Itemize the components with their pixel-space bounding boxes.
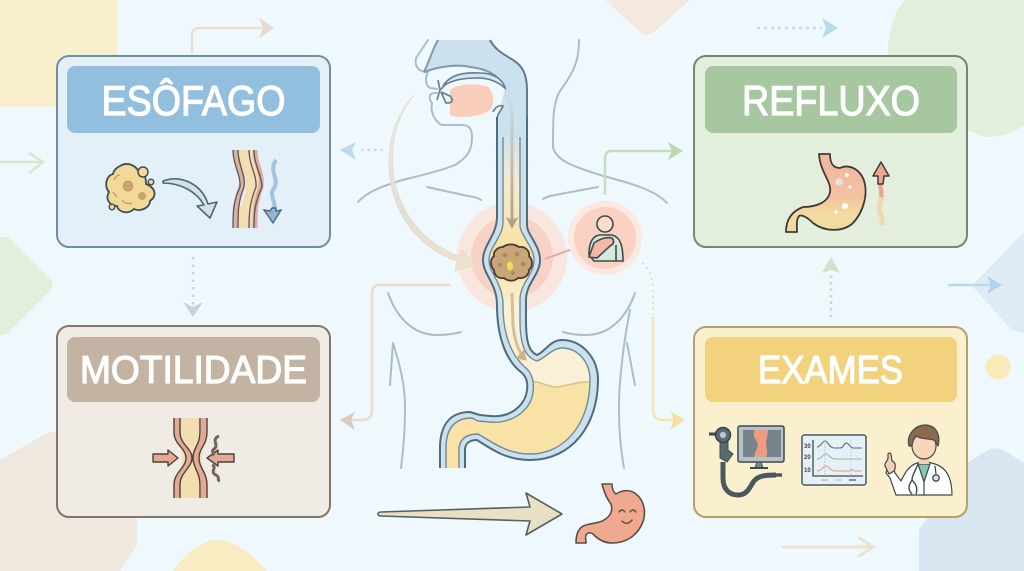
decorative arrow left	[0, 153, 43, 173]
panel: refluxo	[694, 56, 967, 247]
connector line tumor to symptom	[545, 248, 575, 259]
decorative arrow top right	[757, 18, 838, 38]
icon: right pressure arrow	[207, 450, 234, 466]
icon: healthy smiling stomach	[576, 484, 644, 543]
refluxo header	[705, 66, 957, 133]
icon: food bolus	[106, 164, 155, 212]
decorative arrow bottom	[782, 537, 873, 557]
decorative arrow right	[948, 276, 1002, 294]
esofago title: ESÔFAGO	[102, 77, 286, 124]
tongue	[450, 84, 493, 117]
icon: doctor	[885, 425, 952, 495]
arrow inside esophagus upper	[505, 95, 517, 228]
icon: chart: 30	[804, 444, 811, 450]
icon: endoscope	[709, 428, 782, 495]
exames title: EXAMES	[758, 349, 903, 392]
icon: left pressure arrow	[153, 450, 178, 466]
icon: monitor	[738, 426, 784, 468]
icon: curved arrow	[163, 179, 217, 218]
palate arch and lips	[437, 73, 505, 120]
panel: exames	[694, 327, 967, 517]
esophagus and stomach	[424, 40, 600, 470]
arrow: to motilidade	[340, 285, 450, 430]
curved arrow from mouth to tumor	[389, 95, 476, 271]
icon: stomach with acid	[786, 154, 866, 232]
arrow: to refluxo	[605, 142, 683, 195]
arrow: dotted to esofago	[340, 142, 383, 160]
arrow inside esophagus lower	[512, 293, 526, 360]
icon: spasm waves	[212, 436, 220, 481]
icon: narrowed esophagus	[174, 418, 207, 498]
arrow: esofago to motilidade	[183, 257, 203, 317]
icon: esophagus section	[233, 150, 262, 228]
esofago header	[67, 66, 320, 133]
esophagus interior	[446, 142, 590, 468]
nasal cavity and pharynx	[424, 40, 527, 140]
arrow: exames to refluxo	[822, 257, 840, 317]
panel: motilidade	[57, 326, 330, 517]
decorative arrow top left	[192, 18, 274, 53]
refluxo title: REFLUXO	[742, 77, 920, 124]
icon: chart: 20	[804, 455, 811, 461]
body outline	[358, 40, 667, 468]
icon: chart: 10	[804, 468, 811, 474]
symptom circle with chest pain figure	[568, 201, 642, 275]
icon: wavy down arrow	[264, 160, 281, 223]
panel: esofago	[57, 56, 330, 247]
outlines	[440, 117, 598, 468]
exames header	[705, 337, 957, 402]
arrow: to exames	[642, 263, 685, 430]
tumor	[491, 244, 532, 281]
big arrow to healthy stomach	[378, 493, 562, 535]
esophagus wall	[440, 117, 598, 468]
icon: reflux arrow	[873, 162, 889, 225]
inflammation halo around tumor	[457, 202, 567, 312]
motilidade title: MOTILIDADE	[80, 349, 307, 392]
icon: chart	[802, 435, 866, 485]
motilidade header	[67, 337, 320, 402]
